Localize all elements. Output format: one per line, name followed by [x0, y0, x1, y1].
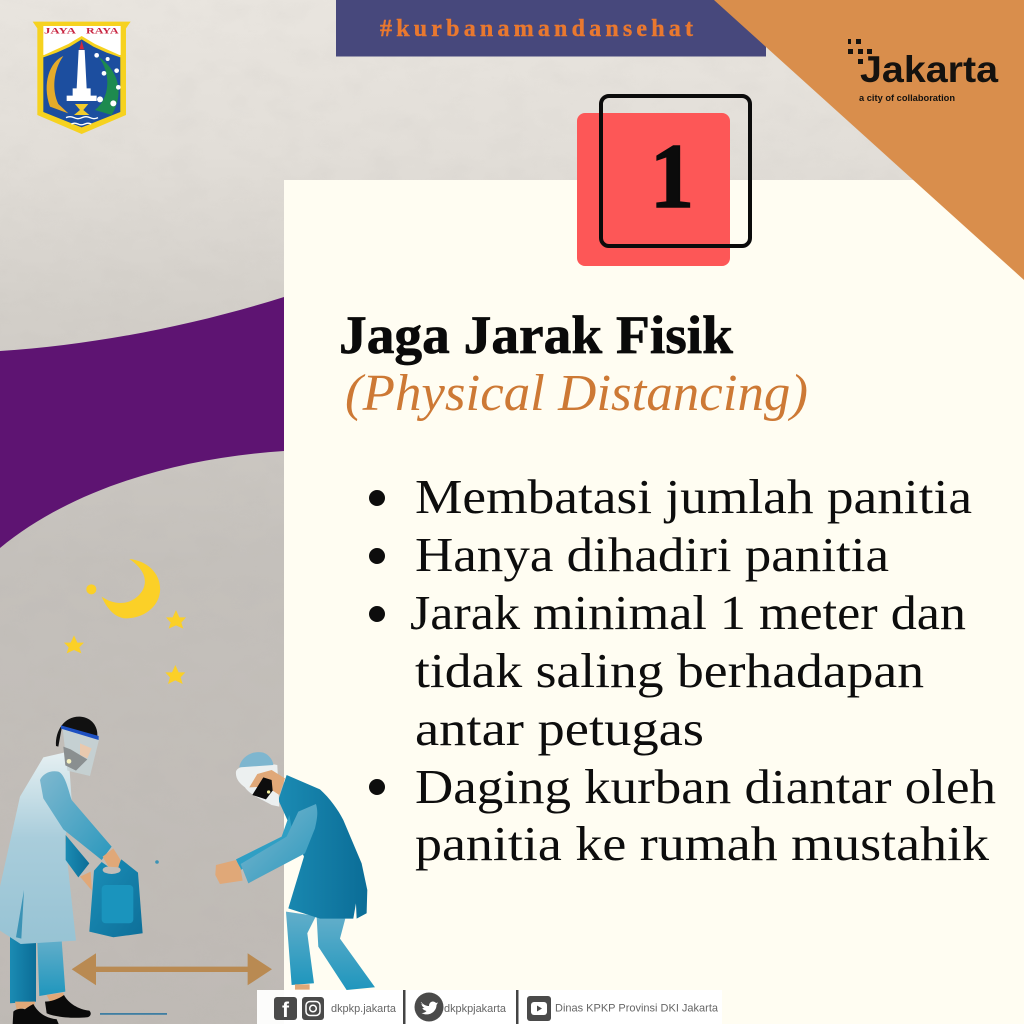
bullet list: Membatasi jumlah panitia — [415, 469, 972, 524]
bullet list: Hanya dihadiri panitia — [415, 527, 889, 582]
social media footer — [257, 990, 722, 1024]
heading: Jaga Jarak Fisik — [339, 305, 733, 365]
person right bowing with mask — [215, 752, 375, 990]
distance arrow — [72, 953, 272, 985]
logo wordmark: Jakarta — [860, 49, 998, 90]
near arm — [40, 771, 112, 860]
far arm — [66, 835, 89, 877]
orange corner triangle — [714, 0, 1024, 280]
tunic slit — [16, 890, 24, 939]
icon: facebook: f — [282, 999, 290, 1022]
trousers — [10, 937, 36, 1003]
water waves — [66, 117, 98, 125]
hands — [215, 860, 243, 884]
tunic — [278, 775, 367, 919]
icon: twitter — [414, 992, 444, 1022]
far sleeve — [236, 815, 293, 870]
bullet list: antar petugas — [415, 701, 704, 756]
ankles — [15, 993, 64, 1012]
logo tagline: a city of collaboration — [859, 93, 955, 104]
monument — [67, 50, 97, 101]
white hair and beard — [236, 764, 279, 807]
icon: facebook — [274, 997, 297, 1022]
near hand — [103, 848, 121, 867]
bullet list: Daging kurban diantar oleh — [415, 759, 996, 814]
bullet list: panitia ke rumah mustahik — [415, 816, 990, 871]
hashtag banner — [336, 0, 766, 56]
number badge — [577, 96, 750, 266]
face — [249, 770, 285, 795]
Jakarta crest emblem — [33, 22, 131, 134]
Jakarta logo — [848, 39, 998, 104]
cap — [239, 752, 273, 767]
hashtag text: #kurbanamandansehat — [380, 16, 693, 42]
cotton branch — [95, 57, 119, 115]
subheading: (Physical Distancing) — [345, 365, 808, 422]
handle: twitter: dkpkpjakarta — [444, 1003, 507, 1015]
crest text left: JAYA — [44, 27, 76, 36]
cream content panel — [284, 180, 1024, 1024]
person left with face shield — [0, 717, 143, 1024]
hair — [56, 717, 97, 747]
near sleeve — [241, 804, 317, 883]
ribbon — [74, 104, 89, 115]
handle: youtube: Dinas KPKP Provinsi DKI Jakarta — [555, 1002, 719, 1014]
moon and stars — [64, 559, 186, 684]
crest text right: RAYA — [86, 27, 119, 36]
tunic — [0, 752, 76, 944]
purple wave band — [0, 297, 284, 548]
blue ground line — [100, 1013, 167, 1015]
shoes — [13, 995, 91, 1024]
bullet list: tidak saling berhadapan — [415, 643, 924, 698]
trousers — [286, 912, 316, 985]
face shield — [63, 728, 99, 776]
icon: instagram — [302, 997, 324, 1020]
bullet list — [369, 469, 996, 871]
mask — [252, 777, 273, 799]
icon: youtube — [527, 996, 551, 1021]
bullet list: Jarak minimal 1 meter dan — [410, 585, 966, 640]
rice stalk — [47, 56, 68, 113]
handle: facebook and instagram: dkpkp.jakarta — [331, 1003, 397, 1015]
number 1: 1 — [650, 125, 694, 227]
bag — [89, 859, 143, 937]
small blue dot — [155, 860, 159, 864]
